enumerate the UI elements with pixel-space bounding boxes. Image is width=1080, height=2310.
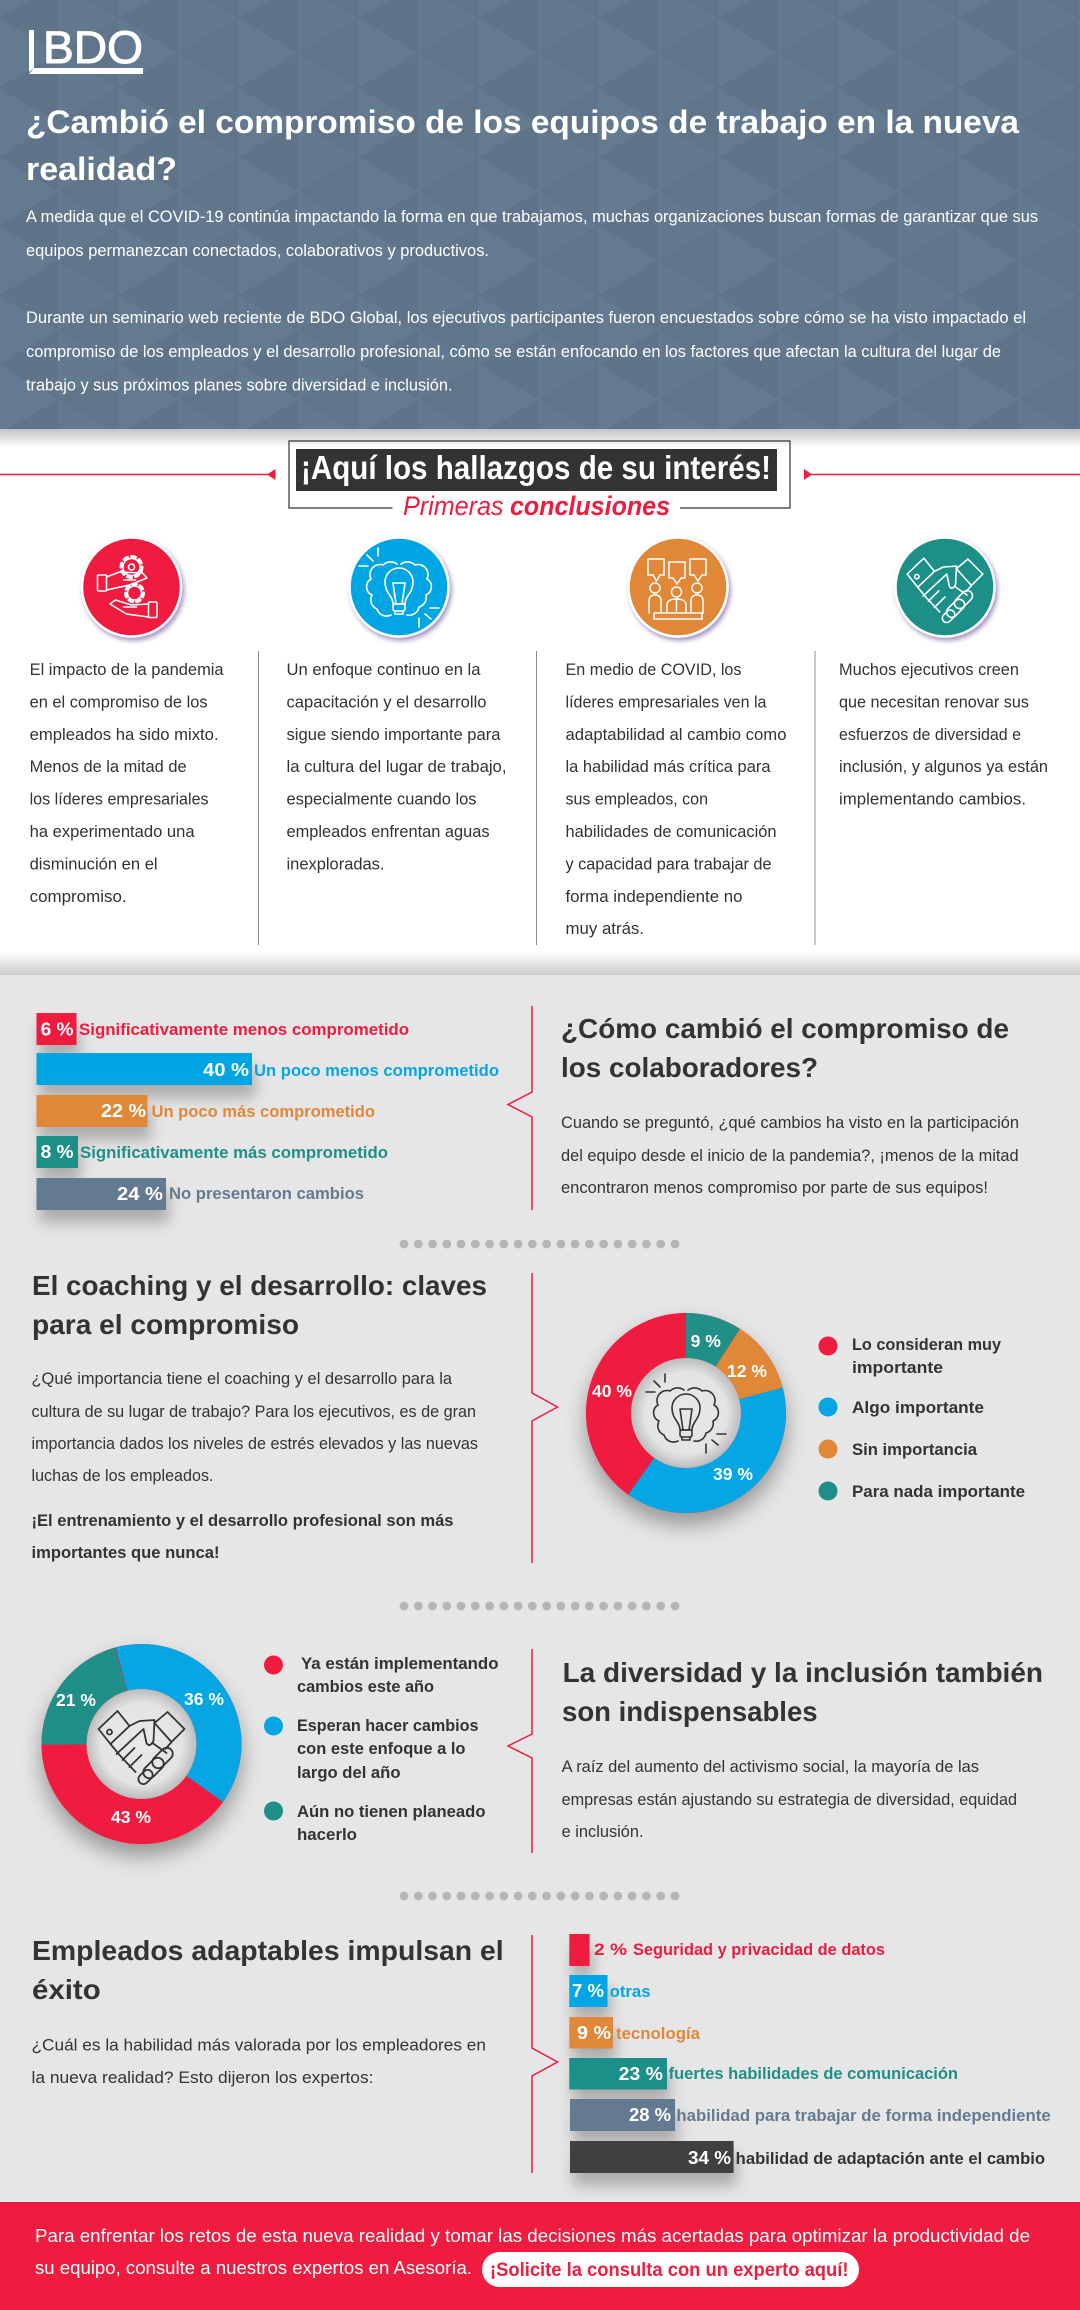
text (566, 660, 786, 938)
text block: adaptable employees: ¿Cuál es la habilidad más valorada por los empleadores en (32, 2036, 486, 2055)
heading: hallazgos: conclusiones (510, 491, 670, 521)
text: compromiso. (30, 887, 127, 906)
text block: coaching: ¡El entrenamiento y el desarrollo profesional son más (32, 1511, 454, 1530)
bar: 9 % (569, 2017, 701, 2048)
bar: 40 % (36, 1053, 499, 1085)
panel: conclusion 2 (286, 538, 506, 873)
footer text (35, 2225, 1030, 2278)
text block: diversity: A raíz del aumento del activismo social, la mayoría de las (562, 1757, 979, 1776)
text block: how engagement changed: del equipo desde el inicio de la pandemia?, ¡menos de la mitad (561, 1146, 1019, 1165)
value labels (592, 1331, 767, 1484)
logo: BDO: BDO (43, 22, 143, 73)
text block: adaptable employees (32, 1935, 504, 2087)
value labels: 39 % (713, 1464, 753, 1484)
panel: conclusion 4 (839, 538, 1048, 809)
bar: 8 %: 8 % (41, 1142, 74, 1162)
legend: coaching importance: Algo importante (852, 1398, 984, 1417)
text: Menos de la mitad de (30, 757, 187, 776)
bar: 9 %: 9 % (577, 2023, 611, 2043)
bar: 9 %: tecnología (616, 2025, 701, 2043)
chart: engagement change bars (36, 1013, 499, 1210)
button: ¡Solicite la consulta con un experto aquí! (490, 2260, 848, 2281)
text block: how engagement changed: encontraron menos compromiso por parte de sus equipos! (561, 1178, 988, 1197)
text block: coaching: ¿Qué importancia tiene el coaching y el desarrollo para la (32, 1369, 453, 1388)
bar: 6 %: Significativamente menos comprometido (79, 1021, 409, 1039)
text block: diversity: empresas están ajustando su estrategia de diversidad, equidad (562, 1790, 1017, 1809)
bar: 22 %: Un poco más comprometido (152, 1103, 375, 1121)
intro text: trabajo y sus próximos planes sobre diversidad e inclusión. (26, 376, 452, 394)
text block: coaching: para el compromiso (32, 1309, 299, 1340)
text block: coaching: importancia dados los niveles de estrés elevados y las nuevas (32, 1434, 478, 1453)
text block: adaptable employees: la nueva realidad? Esto dijeron los expertos: (32, 2068, 374, 2087)
bar: 7 %: otras (610, 1983, 651, 2001)
bar: 7 %: 7 % (572, 1981, 604, 2001)
bar: 40 %: Un poco menos comprometido (254, 1062, 499, 1080)
panel: header (0, 0, 1080, 447)
chart: most valued skills bars (569, 1934, 1051, 2173)
value labels: 40 % (592, 1381, 632, 1401)
text: ha experimentado una (30, 822, 195, 841)
title: realidad? (26, 151, 177, 187)
text block: how engagement changed: ¿Cómo cambió el compromiso de (561, 1013, 1009, 1044)
icon: team with speech bubbles (628, 538, 728, 636)
value labels: 36 % (184, 1689, 224, 1709)
text: forma independiente no (566, 887, 742, 906)
bar: 22 % (36, 1095, 375, 1127)
legend: coaching importance: Para nada importante (852, 1482, 1025, 1501)
legend: coaching importance (818, 1335, 1025, 1501)
legend: diversity plans: Esperan hacer cambios (297, 1716, 478, 1735)
text block: coaching: cultura de su lugar de trabajo? Para los ejecutivos, es de gran (32, 1402, 476, 1421)
title (26, 104, 1019, 187)
text: implementando cambios. (839, 790, 1026, 809)
bar: 22 %: 22 % (101, 1101, 146, 1121)
bar: 23 % (569, 2058, 958, 2090)
bar: 2 % (569, 1934, 885, 1966)
text block: how engagement changed (561, 1013, 1019, 1197)
text: capacitación y el desarrollo (286, 692, 486, 711)
icon: brain and bulb (350, 538, 448, 636)
panel: conclusion 1 (30, 538, 224, 906)
bar: 8 % (36, 1136, 388, 1168)
bar: 40 %: 40 % (203, 1060, 249, 1080)
bar: 28 %: habilidad para trabajar de forma independiente (676, 2107, 1051, 2125)
text: la habilidad más crítica para (566, 757, 771, 776)
legend: diversity plans: largo del año (297, 1763, 400, 1782)
bar: 24 % (36, 1178, 364, 1210)
bar: 2 %: 2 % (594, 1941, 627, 1959)
text: El impacto de la pandemia (30, 660, 224, 679)
chart: coaching importance donut (586, 1313, 786, 1513)
icon: hands and gears (82, 538, 181, 636)
bar: 24 %: 24 % (117, 1184, 163, 1204)
legend: coaching importance: Lo consideran muy (852, 1335, 1002, 1354)
text block: diversity: e inclusión. (562, 1822, 644, 1841)
footer text: su equipo, consulte a nuestros expertos en Asesoría. (35, 2257, 472, 2278)
footer text: Para enfrentar los retos de esta nueva realidad y tomar las decisiones más acertadas para optimizar la productividad de (35, 2225, 1030, 2246)
text: muy atrás. (566, 919, 644, 938)
text: disminución en el (30, 854, 158, 873)
value labels: 12 % (727, 1361, 767, 1381)
value labels (56, 1689, 224, 1827)
value labels: 21 % (56, 1690, 96, 1710)
chart: diversity plans donut (42, 1644, 242, 1844)
text block: coaching: importantes que nunca! (32, 1543, 220, 1562)
intro text: Durante un seminario web reciente de BDO Global, los ejecutivos participantes fueron encuestados sobre cómo se ha visto impactado el (26, 308, 1026, 327)
button (482, 2252, 859, 2287)
text: habilidades de comunicación (566, 822, 776, 841)
text: sigue siendo importante para (286, 725, 501, 744)
bar: 6 %: 6 % (41, 1020, 74, 1040)
text: esfuerzos de diversidad e (839, 725, 1021, 744)
intro text: equipos permanezcan conectados, colaborativos y productivos. (26, 241, 489, 260)
text: en el compromiso de los (30, 692, 208, 711)
text (286, 660, 506, 873)
text block: how engagement changed: Cuando se preguntó, ¿qué cambios ha visto en la participación (561, 1113, 1019, 1132)
bar: 23 %: 23 % (619, 2064, 663, 2084)
heading: hallazgos (0, 441, 1080, 521)
legend: diversity plans: Aún no tienen planeado (297, 1802, 486, 1821)
heading: hallazgos: ¡Aquí los hallazgos de su interés! (301, 449, 771, 486)
bar: 23 %: fuertes habilidades de comunicación (669, 2065, 958, 2083)
panel: conclusion 3 (566, 538, 786, 938)
text: adaptabilidad al cambio como (566, 725, 786, 744)
text: inclusión, y algunos ya están (839, 757, 1048, 776)
bar: 34 %: 34 % (688, 2148, 731, 2168)
text: los líderes empresariales (30, 790, 209, 809)
legend: diversity plans: con este enfoque a lo (297, 1739, 466, 1758)
text: empleados enfrentan aguas (286, 822, 490, 841)
bar: 34 % (570, 2141, 1045, 2173)
text (30, 660, 224, 906)
text: especialmente cuando los (286, 790, 476, 809)
intro text: compromiso de los empleados y el desarrollo profesional, cómo se están enfocando en los factores que afectan la cultura del lugar de (26, 342, 1001, 361)
heading: hallazgos: Primeras (403, 491, 504, 521)
bar: 8 %: Significativamente más comprometido (80, 1144, 388, 1162)
bar: 6 % (36, 1013, 409, 1045)
panel: footer call to action (0, 2202, 1080, 2310)
legend: coaching importance: importante (852, 1358, 943, 1377)
legend: diversity plans: Ya están implementando (301, 1654, 498, 1673)
text: En medio de COVID, los (566, 660, 742, 679)
text: que necesitan renovar sus (839, 692, 1029, 711)
text: y capacidad para trabajar de (566, 854, 772, 873)
text: sus empleados, con (566, 790, 708, 809)
icon: brain and bulb (646, 1374, 726, 1453)
text block: coaching (32, 1270, 487, 1562)
text block: diversity (562, 1657, 1043, 1841)
text: inexploradas. (286, 854, 384, 873)
icon: handshake (896, 538, 994, 636)
bar: 28 %: 28 % (629, 2105, 671, 2125)
text: líderes empresariales ven la (566, 692, 767, 711)
text block: coaching: El coaching y el desarrollo: claves (32, 1270, 487, 1301)
text: la cultura del lugar de trabajo, (286, 757, 506, 776)
text: Un enfoque continuo en la (286, 660, 481, 679)
legend: diversity plans: hacerlo (297, 1825, 357, 1844)
legend: diversity plans: cambios este año (297, 1677, 434, 1696)
text block: coaching: luchas de los empleados. (32, 1466, 214, 1485)
text block: adaptable employees: éxito (32, 1974, 101, 2005)
bar: 2 %: Seguridad y privacidad de datos (633, 1941, 885, 1959)
legend: diversity plans (264, 1654, 498, 1844)
intro text: A medida que el COVID-19 continúa impactando la forma en que trabajamos, muchas organizaciones buscan formas de garantizar que sus (26, 207, 1038, 226)
bar: 7 % (569, 1975, 651, 2007)
bar: 34 %: habilidad de adaptación ante el cambio (736, 2150, 1045, 2168)
value labels: 43 % (111, 1807, 151, 1827)
bar: 28 % (570, 2099, 1051, 2131)
title: ¿Cambió el compromiso de los equipos de trabajo en la nueva (26, 104, 1019, 140)
legend: coaching importance: Sin importancia (852, 1440, 978, 1459)
text block: diversity: La diversidad y la inclusión también (563, 1657, 1043, 1688)
intro text (26, 207, 1038, 394)
text (839, 660, 1048, 809)
text block: how engagement changed: los colaboradores? (561, 1052, 818, 1083)
value labels: 9 % (691, 1331, 721, 1351)
text block: adaptable employees: Empleados adaptables impulsan el (32, 1935, 504, 1966)
text: Muchos ejecutivos creen (839, 660, 1019, 679)
icon: handshake (98, 1711, 184, 1786)
bar: 24 %: No presentaron cambios (169, 1185, 364, 1203)
text: empleados ha sido mixto. (30, 725, 219, 744)
text block: diversity: son indispensables (562, 1696, 818, 1727)
